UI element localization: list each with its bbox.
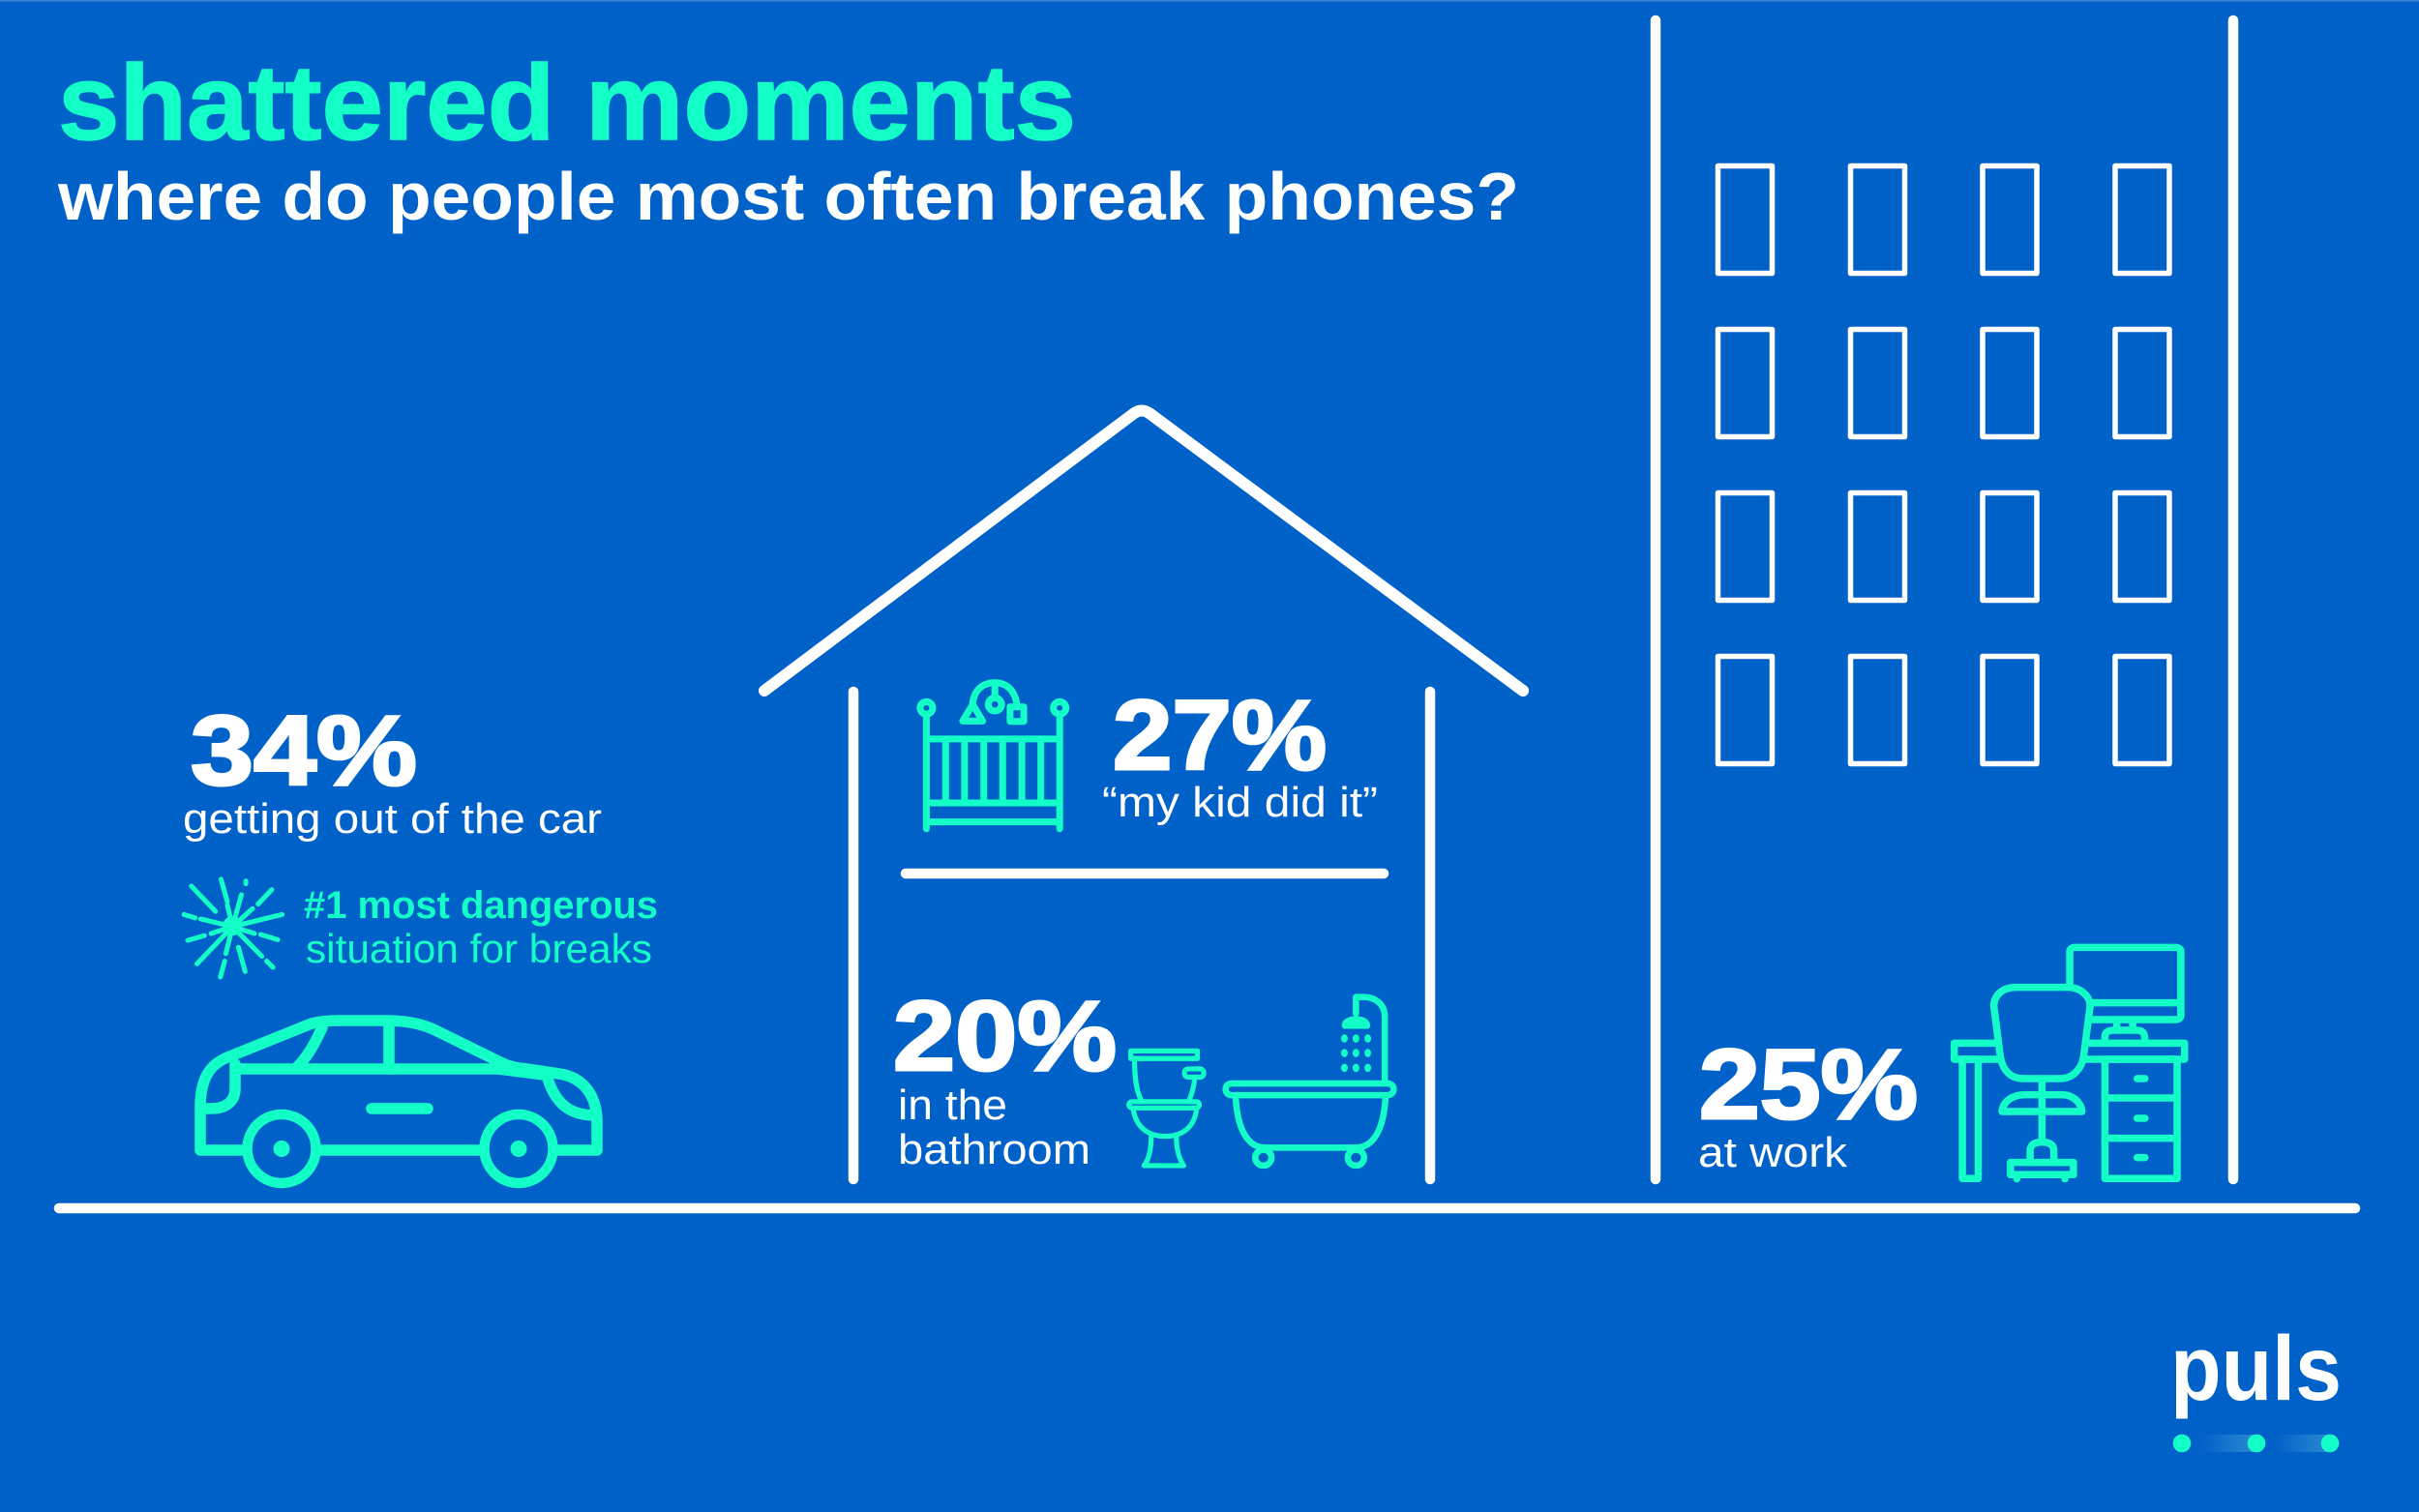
- ground line: [59, 1203, 2355, 1213]
- icon: burst: [184, 879, 283, 977]
- 34 percent: 34%: [191, 696, 417, 806]
- title: shattered moments: [58, 44, 1076, 163]
- house outline: [764, 410, 1523, 1179]
- logo dots: [2173, 1435, 2339, 1452]
- office building outline: [1656, 20, 2233, 1179]
- at work: at work: [1698, 1129, 1848, 1176]
- stat: 25% work: [1698, 1029, 1918, 1176]
- logo: puls: [2170, 1318, 2342, 1452]
- stat: 34% car: [183, 696, 658, 971]
- 20 percent: 20%: [893, 981, 1117, 1091]
- 27 percent: 27%: [1113, 680, 1327, 790]
- icon: car: [200, 1021, 597, 1183]
- most dangerous callout: #1 most dangerous: [304, 884, 658, 927]
- logo wordmark: puls: [2170, 1318, 2342, 1420]
- getting out of the car: getting out of the car: [183, 795, 602, 843]
- icon: desk and chair: [1955, 947, 2185, 1179]
- stat: 20% bathroom: [893, 981, 1117, 1173]
- subtitle: where do people most often break phones?: [57, 159, 1519, 234]
- 25 percent: 25%: [1699, 1029, 1918, 1140]
- building windows: [1718, 166, 2169, 764]
- in the: in the: [898, 1082, 1007, 1129]
- my kid did it: “my kid did it”: [1102, 779, 1378, 826]
- stat: 27% kid: [1102, 680, 1378, 826]
- icon: crib: [920, 683, 1066, 829]
- bathroom: bathroom: [898, 1126, 1090, 1173]
- situation for breaks: situation for breaks: [306, 926, 652, 971]
- icon: toilet: [1129, 1051, 1204, 1166]
- icon: bathtub with shower: [1226, 997, 1393, 1166]
